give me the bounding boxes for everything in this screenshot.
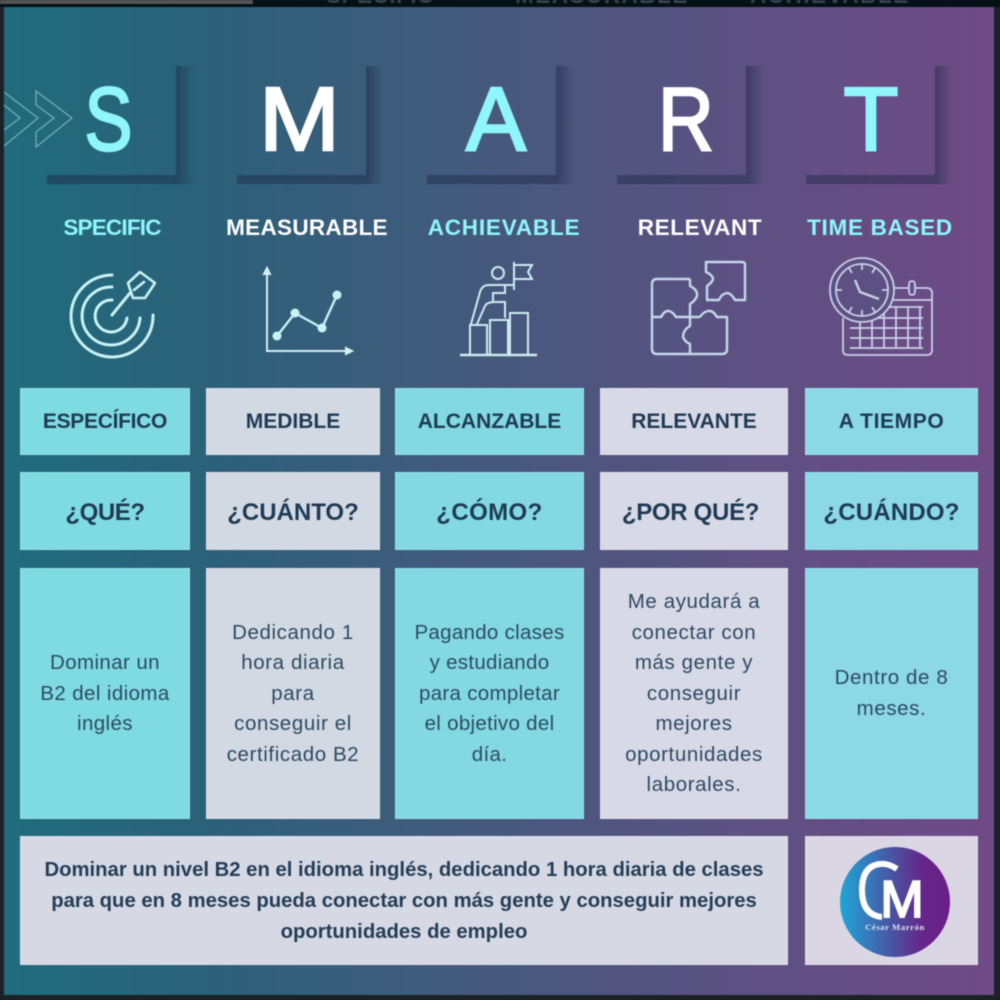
letter T: T bbox=[844, 70, 898, 170]
heading achievable: ACHIEVABLE bbox=[428, 215, 580, 240]
icon: target bbox=[68, 270, 157, 360]
text: relevant: oportunidades bbox=[625, 743, 763, 766]
summary statement: Dominar un nivel B2 en el idioma inglés, dedicando 1 hora diaria de clases bbox=[44, 858, 764, 880]
shadow R right bbox=[746, 66, 764, 184]
heading specific: SPECIFIC bbox=[63, 215, 161, 240]
text: relevant: más gente y bbox=[635, 651, 753, 674]
cell: por que bbox=[600, 472, 788, 550]
icon: puzzle pieces bbox=[650, 260, 747, 356]
text: achievable bbox=[395, 568, 584, 819]
heading time based: TIME BASED bbox=[807, 215, 953, 240]
logo panel bbox=[805, 836, 978, 965]
cell: especifico: ESPECÍFICO bbox=[43, 410, 167, 432]
text: relevant: mejores bbox=[655, 712, 733, 735]
text: measurable: conseguir el bbox=[234, 712, 352, 735]
letter S: S bbox=[84, 70, 133, 170]
text: relevant bbox=[600, 568, 788, 819]
shadow A bottom bbox=[427, 175, 556, 184]
text: achievable: el objetivo del bbox=[425, 712, 554, 735]
cell: que: ¿QUÉ? bbox=[65, 498, 145, 526]
cell: como bbox=[395, 472, 584, 550]
text: specific bbox=[20, 568, 190, 819]
text: time based bbox=[805, 568, 978, 819]
shadow M right bbox=[366, 66, 384, 184]
summary statement: para que en 8 meses pueda conectar con más gente y conseguir mejores bbox=[51, 890, 757, 912]
shadow S bottom bbox=[47, 175, 176, 184]
cell: relevante bbox=[600, 388, 788, 455]
text: relevant: conseguir bbox=[647, 682, 741, 705]
cell: cuando: ¿CUÁNDO? bbox=[823, 498, 960, 526]
text: measurable: certificado B2 bbox=[227, 743, 359, 766]
text: achievable: día. bbox=[472, 743, 507, 766]
logo: Cesar Marron: M bbox=[880, 871, 924, 929]
text: achievable: para completar bbox=[419, 682, 560, 705]
letter M: M bbox=[259, 70, 340, 170]
cell: relevante: RELEVANTE bbox=[631, 410, 757, 432]
cell: alcanzable: ALCANZABLE bbox=[418, 410, 561, 432]
cell: cuanto bbox=[206, 472, 380, 550]
text: time based: Dentro de 8 bbox=[835, 666, 948, 689]
text: relevant: laborales. bbox=[647, 773, 741, 796]
top screenshot strip bbox=[0, 0, 1000, 7]
text: measurable: hora diaria bbox=[241, 651, 345, 674]
text: relevant: conectar con bbox=[632, 621, 756, 644]
shadow R bottom bbox=[617, 175, 746, 184]
shadow T bottom bbox=[806, 175, 935, 184]
logo: Cesar Marron: César Marrón bbox=[865, 922, 925, 932]
summary statement: oportunidades de empleo bbox=[281, 920, 527, 942]
cell: alcanzable bbox=[395, 388, 584, 455]
shadow A right bbox=[556, 66, 574, 184]
cell: medible: MEDIBLE bbox=[246, 410, 340, 432]
text: relevant: Me ayudará a bbox=[628, 590, 760, 613]
shadow S right bbox=[176, 66, 194, 184]
icon: chevrons bbox=[3, 90, 74, 148]
icon: line chart bbox=[262, 266, 354, 356]
text: measurable: Dedicando 1 bbox=[232, 621, 354, 644]
heading relevant: RELEVANT bbox=[638, 215, 762, 240]
letter R: R bbox=[658, 70, 714, 170]
text: measurable bbox=[206, 568, 380, 819]
logo: Cesar Marron bbox=[839, 846, 951, 958]
icon: clock and calendar bbox=[828, 256, 934, 357]
cell: que bbox=[20, 472, 190, 550]
text: measurable: para bbox=[271, 682, 315, 705]
text: achievable: y estudiando bbox=[430, 651, 549, 674]
summary statement bbox=[20, 836, 788, 965]
text: specific: B2 del idioma bbox=[40, 682, 170, 705]
cell: a tiempo: A TIEMPO bbox=[839, 410, 944, 432]
shadow T right bbox=[935, 66, 953, 184]
letter A: A bbox=[466, 70, 526, 170]
text: time based: meses. bbox=[857, 697, 926, 720]
heading measurable: MEASURABLE bbox=[226, 215, 388, 240]
cell: a tiempo bbox=[805, 388, 978, 455]
shadow M bottom bbox=[237, 175, 366, 184]
cell: por que: ¿POR QUÉ? bbox=[622, 498, 759, 526]
icon: person on steps with flag bbox=[459, 261, 538, 357]
text: specific: Dominar un bbox=[50, 651, 160, 674]
text: achievable: Pagando clases bbox=[414, 621, 565, 644]
cell: medible bbox=[206, 388, 380, 455]
cell: cuanto: ¿CUÁNTO? bbox=[227, 498, 359, 526]
cell: especifico bbox=[20, 388, 190, 455]
cell: como: ¿CÓMO? bbox=[436, 498, 543, 526]
cell: cuando bbox=[805, 472, 978, 550]
text: specific: inglés bbox=[77, 712, 133, 735]
